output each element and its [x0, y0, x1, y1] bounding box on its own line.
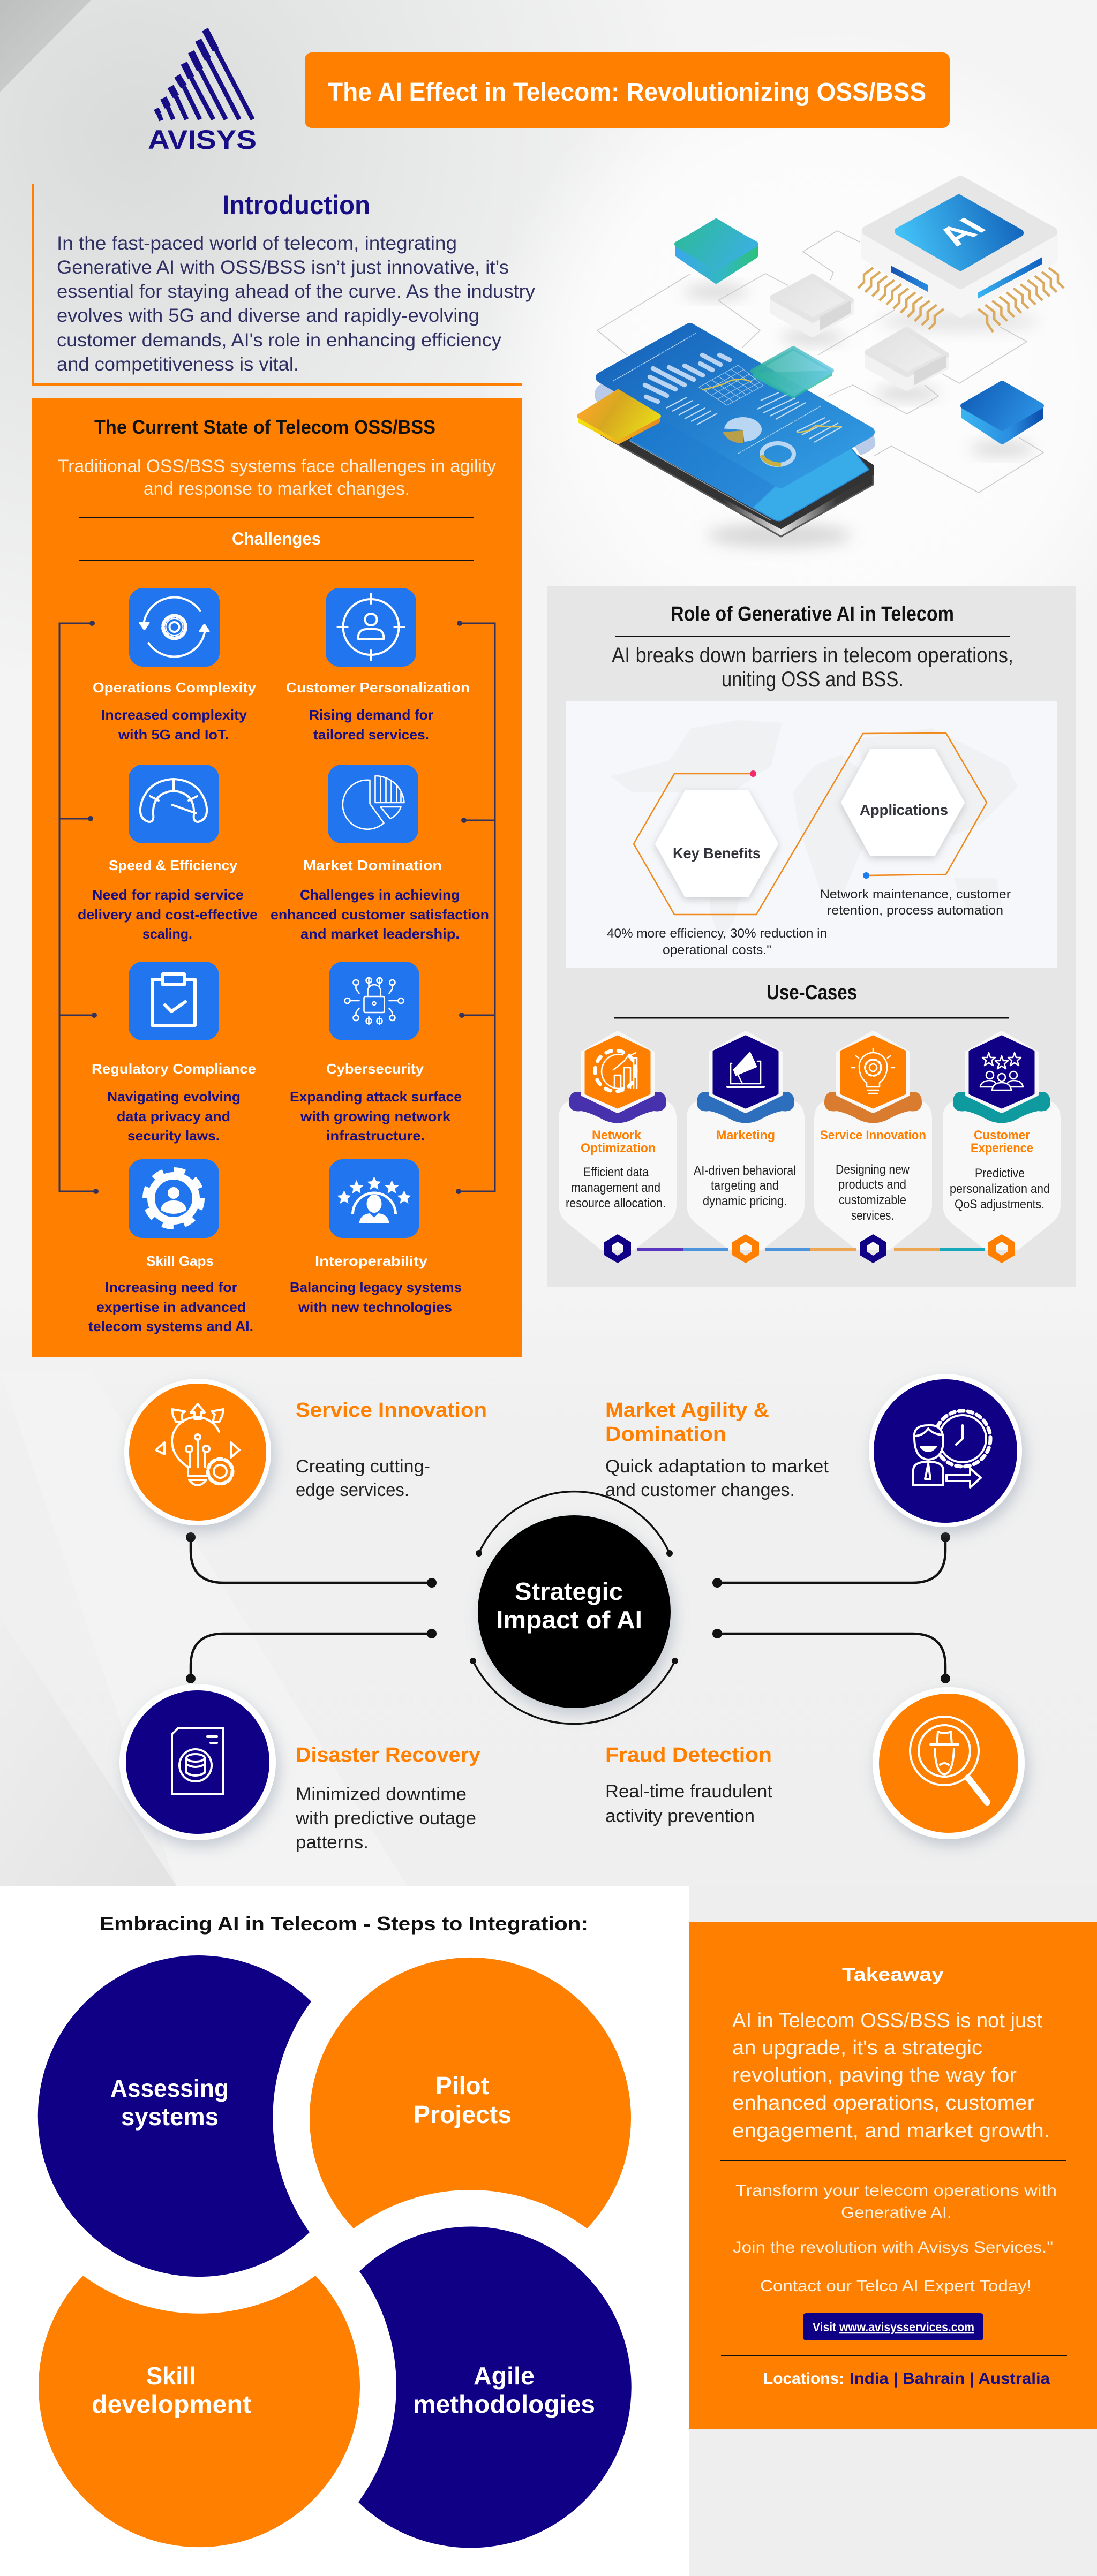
circle icon: service innovation: [124, 1379, 271, 1525]
icon: AI chip: AI: [928, 213, 995, 251]
heading: role of generative AI: Role of Generative AI in Telecom: [671, 603, 954, 625]
topic: market agility and domination: Quick adaptation to market: [605, 1456, 829, 1477]
topic: disaster recovery: Minimized downtime: [296, 1784, 467, 1804]
challenge: interoperability: Interoperability: [315, 1253, 428, 1269]
icon: three stars and people: [980, 1053, 1023, 1090]
challenge: cybersecurity: with growing network: [300, 1108, 451, 1124]
icon: circuit lock: [345, 978, 404, 1024]
use-case: network optimization: Efficient data: [583, 1165, 649, 1180]
challenge: skill gaps: Increasing need for: [105, 1279, 237, 1295]
text: call to action: Join the revolution with Avisys Services.": [733, 2239, 1053, 2256]
text: call to action: Transform your telecom operations with: [735, 2182, 1057, 2200]
challenge: market domination: Market Domination: [303, 857, 442, 873]
step: agile methodologies: methodologies: [413, 2390, 595, 2418]
icon: gear with arrows: [140, 598, 209, 656]
challenge: skill gaps: [88, 1159, 253, 1334]
panel: steps to integration: [0, 1886, 689, 2576]
text: call to action: Generative AI.: [841, 2204, 952, 2222]
challenge: interoperability: with new technologies: [298, 1299, 452, 1315]
text: benefits detail: operational costs.": [663, 943, 771, 957]
button: visit website: Visit www.avisysservices.com: [813, 2320, 974, 2334]
use-case: service innovation: customizable: [839, 1193, 906, 1207]
text: current state intro: Traditional OSS/BSS systems face challenges in agility: [58, 456, 496, 477]
challenge: regulatory compliance: Navigating evolving: [107, 1089, 241, 1105]
challenge: cybersecurity: infrastructure.: [326, 1128, 425, 1144]
topic: fraud detection: activity prevention: [605, 1806, 755, 1826]
step: pilot projects: Pilot: [435, 2072, 489, 2099]
icon: gear and rising bars: [595, 1051, 637, 1091]
heading: introduction: Introduction: [222, 190, 370, 220]
text: applications detail: Network maintenance, customer: [820, 887, 1011, 902]
step: pilot projects: Projects: [414, 2101, 512, 2128]
text: introduction body: essential for staying ahead of the curve. As the industry: [57, 281, 536, 302]
use-case: customer experience: personalization and: [950, 1182, 1050, 1196]
step: assessing systems: systems: [121, 2103, 219, 2131]
text: role summary: uniting OSS and BSS.: [722, 668, 904, 691]
use-case: network optimization: resource allocation.: [566, 1196, 666, 1211]
hexagon outline connector: [634, 733, 987, 915]
topic: fraud detection: Fraud Detection: [605, 1744, 772, 1766]
text: introduction body: evolves with 5G and diverse and rapidly-evolving: [57, 305, 479, 326]
world map backdrop: [611, 720, 1018, 942]
topic: service innovation: [296, 1399, 487, 1500]
icon: blue block: [963, 383, 1041, 442]
text: current state intro: [58, 456, 496, 499]
use-case: service innovation: Service Innovation: [820, 1128, 926, 1143]
challenge: interoperability: Balancing legacy systems: [290, 1279, 462, 1295]
heading: takeaway: Takeaway: [842, 1965, 944, 1985]
hexagon: key benefits: [656, 791, 777, 896]
use-case: customer experience: Predictive: [975, 1166, 1025, 1181]
topic: disaster recovery: Disaster Recovery: [296, 1744, 480, 1766]
circle icon: market agility: [869, 1374, 1022, 1527]
text: role summary: [612, 644, 1013, 691]
text: introduction body: customer demands, AI's role in enhancing efficiency: [57, 330, 502, 351]
use-case: network optimization: management and: [571, 1181, 660, 1195]
text: locations: India | Bahrain | Australia: [850, 2370, 1050, 2388]
challenge: operations complexity: Operations Complexity: [93, 679, 257, 696]
text: applications detail: retention, process automation: [827, 903, 1003, 918]
use-case: network optimization: Optimization: [581, 1141, 656, 1155]
topic: service innovation: Service Innovation: [296, 1399, 487, 1422]
button: visit website: [803, 2313, 983, 2340]
illustration: isometric AI chip and phone network: [579, 178, 1064, 547]
step: agile methodologies: [358, 2226, 632, 2548]
challenge: customer personalization: Customer Personalization: [286, 679, 470, 696]
challenge: market domination: Challenges in achieving: [300, 887, 460, 903]
challenge: cybersecurity: [290, 962, 462, 1144]
text: introduction body: [57, 233, 536, 375]
step: skill development: development: [92, 2390, 251, 2418]
challenge: speed and efficiency: delivery and cost-effective: [78, 906, 258, 923]
step: assessing systems: Assessing: [110, 2074, 229, 2102]
topic: service innovation: edge services.: [296, 1480, 409, 1500]
text: locations: Locations:: [763, 2370, 844, 2388]
challenge: speed and efficiency: [78, 765, 258, 942]
text: benefits detail: [607, 926, 827, 957]
use-case: service innovation: Designing new: [836, 1162, 910, 1177]
text: introduction body: and competitiveness is vital.: [57, 354, 299, 375]
use-case: customer experience: [943, 1032, 1061, 1250]
text: introduction body: In the fast-paced world of telecom, integrating: [57, 233, 457, 254]
icon: yellow glass block: [579, 391, 659, 443]
hexagon: key benefits: Key Benefits: [673, 845, 761, 862]
text: takeaway body: AI in Telecom OSS/BSS is not just: [732, 2010, 1042, 2032]
central hub: strategic impact of AI: Strategic: [515, 1577, 623, 1605]
icon: gray block: [772, 276, 851, 335]
challenge: cybersecurity: Expanding attack surface: [290, 1089, 462, 1105]
left bracket connector: [59, 621, 99, 1194]
timeline: use-case connectors: [604, 1234, 1015, 1263]
use-case: network optimization: Network: [592, 1128, 642, 1143]
panel: current state of telecom OSS/BSS: [32, 398, 522, 1357]
logo: Avisys: [148, 29, 257, 155]
panel: introduction: [32, 184, 536, 386]
icon: gear with person: [147, 1172, 200, 1225]
challenge: regulatory compliance: [92, 962, 256, 1144]
icon: pie chart: [343, 776, 404, 829]
logo: Avisys: AVISYS: [148, 125, 257, 155]
use-case: network optimization: [559, 1032, 677, 1250]
use-case: marketing: [687, 1032, 805, 1250]
circle icon: disaster recovery: [119, 1684, 276, 1840]
text: introduction body: Generative AI with OSS/BSS isn’t just innovative, it’s: [57, 257, 509, 278]
panel: takeaway: [689, 1922, 1097, 2429]
heading: current state: The Current State of Telecom OSS/BSS: [94, 416, 435, 438]
icon: speedometer: [140, 779, 207, 822]
icon: stars over person: [337, 1176, 411, 1223]
challenge: cybersecurity: Cybersecurity: [326, 1061, 424, 1077]
hexagon: applications: Applications: [860, 802, 948, 818]
topic: service innovation: Creating cutting-: [296, 1456, 430, 1477]
challenge: operations complexity: with 5G and IoT.: [118, 727, 229, 743]
step: pilot projects: [310, 1958, 631, 2228]
challenge: market domination: enhanced customer satisfaction: [271, 906, 489, 923]
hexagon: applications: [842, 750, 964, 855]
challenge: skill gaps: telecom systems and AI.: [88, 1318, 253, 1334]
text: takeaway body: revolution, paving the way for: [732, 2064, 1017, 2087]
topic: market agility and domination: Domination: [605, 1423, 726, 1446]
connectors: hub to topics: [186, 1532, 950, 1683]
icon: AI chip: [858, 178, 1064, 332]
use-case: service innovation: services.: [851, 1208, 894, 1223]
icon: teal block: [677, 221, 756, 282]
text: current state intro: and response to market changes.: [144, 479, 410, 499]
icon: megaphone on laptop: [727, 1053, 764, 1087]
icon: phone with dashboard: [595, 328, 875, 537]
challenge: customer personalization: tailored services.: [313, 727, 429, 743]
topic: fraud detection: [605, 1744, 773, 1826]
text: takeaway body: engagement, and market growth.: [732, 2120, 1050, 2142]
circle icon: fraud detection: [873, 1687, 1025, 1839]
text: call to action: Contact our Telco AI Expert Today!: [760, 2277, 1032, 2295]
challenge: speed and efficiency: scaling.: [142, 926, 192, 942]
use-case: marketing: Marketing: [716, 1128, 775, 1143]
use-case: service innovation: products and: [838, 1177, 906, 1192]
topic: disaster recovery: with predictive outage: [295, 1808, 476, 1829]
use-case: service innovation: [814, 1032, 932, 1250]
heading: use-cases: Use-Cases: [767, 981, 857, 1004]
text: takeaway body: [732, 2010, 1050, 2142]
challenge: speed and efficiency: Need for rapid service: [92, 887, 244, 903]
step: assessing systems: [38, 1955, 311, 2277]
icon: bulb with gear: [852, 1048, 895, 1093]
icon: gray block: [867, 329, 946, 388]
text: benefits detail: 40% more efficiency, 30% reduction in: [607, 926, 827, 941]
text: call to action: [733, 2182, 1057, 2295]
text: applications detail: [820, 887, 1011, 918]
topic: disaster recovery: [295, 1744, 480, 1853]
text: locations: [763, 2370, 1050, 2388]
title banner: [305, 52, 950, 128]
icon: clipboard: [152, 974, 195, 1025]
challenge: regulatory compliance: data privacy and: [117, 1108, 230, 1124]
challenge: customer personalization: [286, 588, 470, 743]
challenge: skill gaps: expertise in advanced: [96, 1299, 246, 1315]
challenge: market domination: [271, 765, 489, 942]
challenge: regulatory compliance: security laws.: [127, 1128, 220, 1144]
use-case: marketing: targeting and: [711, 1179, 779, 1193]
section: strategic impact of AI: [119, 1374, 1025, 1853]
topic: market agility and domination: and customer changes.: [605, 1480, 795, 1500]
central hub: strategic impact of AI: [470, 1492, 678, 1724]
use-case: marketing: AI-driven behavioral: [694, 1164, 796, 1178]
topic: disaster recovery: patterns.: [296, 1832, 369, 1853]
use-case: customer experience: QoS adjustments.: [955, 1197, 1045, 1212]
use-case: customer experience: Experience: [971, 1141, 1033, 1155]
challenge: speed and efficiency: Speed & Efficiency: [109, 857, 238, 873]
challenge: regulatory compliance: Regulatory Compliance: [92, 1061, 256, 1077]
use-case: marketing: dynamic pricing.: [703, 1194, 787, 1208]
panel: role of generative AI: [547, 586, 1076, 1287]
title banner: The AI Effect in Telecom: Revolutionizing OSS/BSS: [328, 78, 926, 107]
topic: market agility and domination: [605, 1399, 829, 1500]
text: takeaway body: enhanced operations, customer: [732, 2092, 1034, 2114]
right bracket connector: [456, 621, 495, 1194]
challenge: market domination: and market leadership.: [300, 926, 460, 942]
central hub: strategic impact of AI: Impact of AI: [496, 1606, 642, 1634]
challenge: operations complexity: Increased complexity: [101, 707, 247, 723]
text: role summary: AI breaks down barriers in telecom operations,: [612, 644, 1013, 667]
icon: target person: [337, 594, 404, 660]
panel: benefits and applications: [566, 701, 1057, 968]
challenge: skill gaps: Skill Gaps: [146, 1253, 214, 1269]
step: agile methodologies: Agile: [474, 2362, 535, 2390]
text: takeaway body: an upgrade, it's a strategic: [732, 2037, 982, 2059]
heading: challenges: Challenges: [232, 529, 321, 548]
topic: market agility and domination: Market Agility &: [605, 1399, 769, 1422]
challenge: customer personalization: Rising demand for: [309, 707, 433, 723]
challenge: operations complexity: [93, 588, 257, 743]
step: skill development: Skill: [146, 2362, 196, 2390]
challenge: interoperability: [290, 1159, 462, 1315]
topic: fraud detection: Real-time fraudulent: [605, 1781, 773, 1802]
use-case: customer experience: Customer: [974, 1128, 1030, 1143]
heading: steps to integration: Embracing AI in Telecom - Steps to Integration:: [100, 1913, 588, 1935]
icon: teal glass block: [753, 348, 832, 398]
step: skill development: [39, 2276, 360, 2547]
